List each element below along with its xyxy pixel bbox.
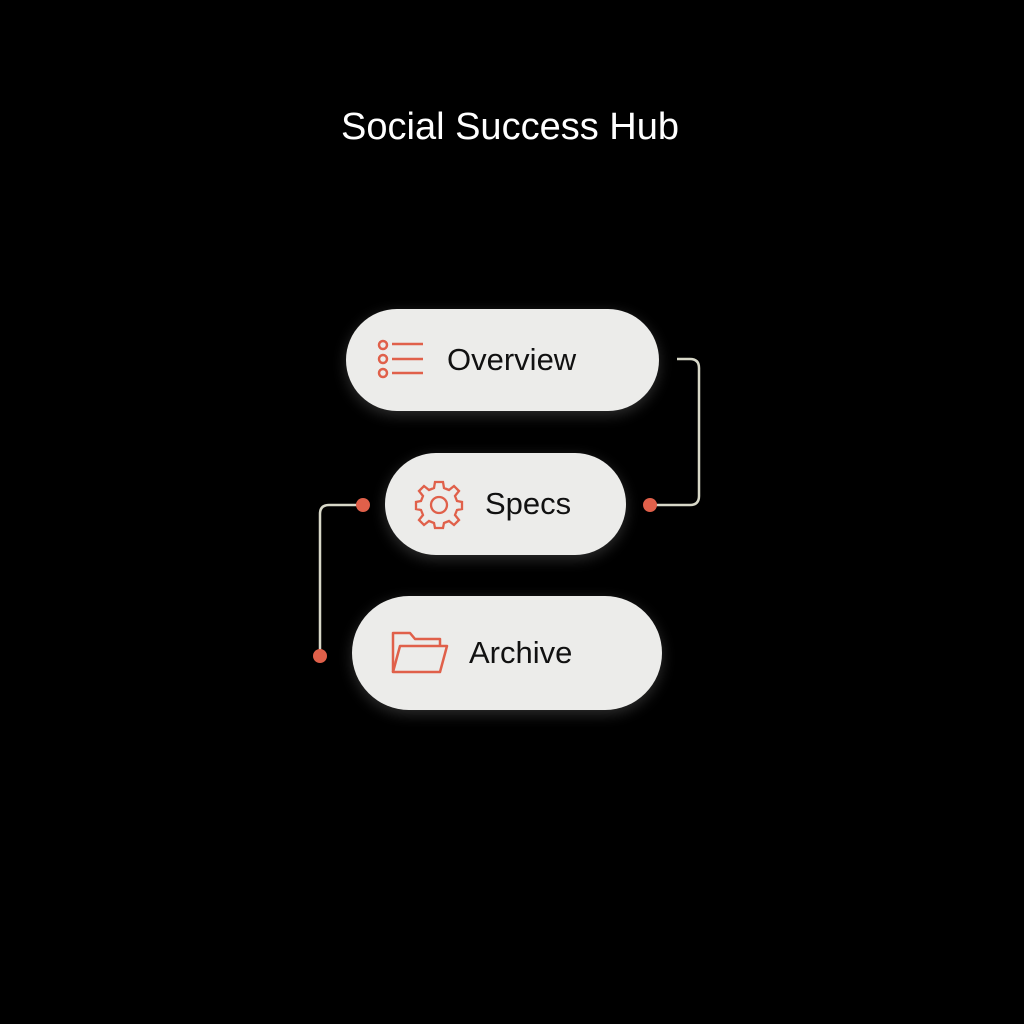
title: Social Success Hub xyxy=(341,106,679,148)
icon: gear xyxy=(414,480,464,530)
label: Archive xyxy=(469,635,572,670)
icon: folder xyxy=(392,632,448,674)
pill: archive xyxy=(352,596,662,710)
label: Overview xyxy=(447,342,576,377)
pill: overview xyxy=(346,309,659,411)
pill: specs xyxy=(385,453,626,555)
icon: list xyxy=(378,340,423,378)
label: Specs xyxy=(485,486,571,521)
